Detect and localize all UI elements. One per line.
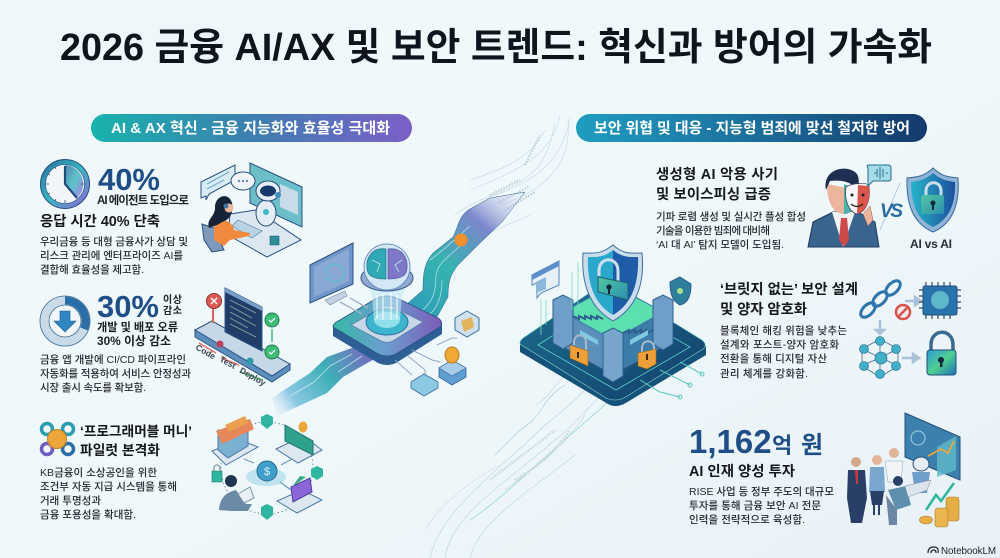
heading pill: security threats and response (576, 114, 927, 142)
stat: 30% fewer errors: 감소 (163, 305, 182, 317)
castle towers (553, 295, 573, 349)
castle walls (563, 312, 613, 375)
heading pill: AI & AX innovation (91, 114, 412, 142)
stat: 1,162 billion won AI talent (689, 423, 834, 526)
heading pill: security threats and response: 보안 위협 및 대응 - 지능형 범죄에 맞선 철저한 방어 (594, 120, 910, 137)
icon: coin with links (42, 424, 74, 454)
stat: generative AI fraud (656, 166, 806, 251)
data ribbon upper (408, 192, 525, 326)
stat: programmable money pilot: 파일럿 본격화 (80, 443, 160, 458)
data circuit lines: bottom stream (425, 370, 615, 558)
stat: generative AI fraud: 및 보이스피싱 급증 (656, 186, 771, 203)
stat: 1,162 billion won AI talent: 원 (801, 432, 823, 459)
icon: donut down arrow (40, 296, 90, 346)
stat: 40% faster response: 결합해 효율성을 제고함. (40, 263, 144, 276)
stat: bridgeless design and quantum crypto (720, 281, 858, 380)
illustration: CI/CD conveyor: Test (218, 354, 238, 371)
stat: 1,162 billion won AI talent: 억 (772, 433, 792, 458)
stat: bridgeless design and quantum crypto: 및 양자 암호화 (720, 301, 807, 318)
illustration: CI/CD conveyor (194, 288, 290, 388)
small shield (670, 277, 691, 305)
stat: 30% fewer errors: 30% 이상 감소 (97, 334, 171, 348)
coin stack (439, 360, 466, 385)
illustration: programmable money network: $ (264, 466, 270, 478)
chip tile (411, 374, 438, 396)
stat: 1,162 billion won AI talent: AI 인재 양성 투자 (689, 463, 795, 480)
data ribbon lower (272, 345, 376, 416)
stat: 30% fewer errors: 이상 (163, 293, 182, 306)
icon: clock (40, 160, 90, 208)
illustration: CI/CD conveyor: Code (194, 342, 218, 361)
central platform (333, 323, 442, 365)
stat: 1,162 billion won AI talent: 투자를 통해 금융 보안 AI 전문 (689, 499, 821, 512)
stat: 40% faster response: 우리금융 등 대형 금융사가 상담 및 (40, 235, 188, 248)
stat: 30% fewer errors: 금융 앱 개발에 CI/CD 파이프라인 (40, 353, 186, 366)
stat: bridgeless design and quantum crypto: 블록체인 해킹 위험을 낮추는 (720, 324, 847, 337)
cube hexagon (455, 311, 479, 337)
stat: 40% faster response: AI 에이전트 도입으로 (97, 194, 189, 207)
logo: NotebookLM: NotebookLM (941, 546, 996, 557)
illustration: CI/CD conveyor: Deploy (238, 365, 268, 388)
monitor (310, 243, 353, 303)
orange data dot (454, 234, 468, 246)
stat: programmable money pilot: 금융 포용성을 확대함. (40, 508, 136, 521)
stat: 30% fewer errors (40, 289, 191, 394)
illustration: deepfake man with mask (808, 165, 903, 247)
stat: 30% fewer errors: 개발 및 배포 오류 (97, 320, 178, 334)
circuit links (395, 338, 457, 376)
center illustration: security fortress (520, 245, 706, 406)
stat: generative AI fraud: 기술을 이용한 빔죄에 대비해 (656, 224, 770, 237)
stat: 1,162 billion won AI talent: 1,162 (689, 423, 772, 460)
stat: programmable money pilot: 거래 투명성과 (40, 495, 101, 507)
illustration: agent and robot desk (201, 163, 302, 257)
fortress platform (520, 343, 706, 406)
icon: AI vs AI shield (907, 168, 958, 251)
heading pill: AI & AX innovation: AI & AX 혁신 - 금융 지능화와 효율성 극대화 (111, 120, 390, 137)
data circuit lines: top right stream (455, 115, 570, 280)
illustration: talent team with robot and coins (847, 413, 960, 527)
stat: 30% fewer errors: 시장 출시 속도를 확보함. (40, 381, 146, 394)
stat: bridgeless design and quantum crypto: ‘브릿지 없는’ 보안 설계 (720, 281, 858, 298)
big shield with lock (583, 245, 643, 321)
stat: bridgeless design and quantum crypto: 설계와 포스트-양자 암호화 (720, 338, 839, 351)
stat: 40% faster response: 40% (98, 162, 160, 197)
orange padlocks (574, 335, 586, 350)
stat: 40% faster response: 리스크 관리에 엔터프라이즈 AI를 (40, 250, 183, 262)
stat: generative AI fraud: 기파 로렴 생성 및 실시간 플성 합성 (656, 210, 806, 223)
stat: programmable money pilot: KB금융이 소상공인을 위한 (40, 466, 157, 479)
stat: generative AI fraud: 생성형 AI 악용 사기 (656, 166, 778, 183)
VS label: VS (880, 201, 903, 222)
stat: programmable money pilot: 조건부 자동 지급 시스템을 통해 (40, 480, 177, 493)
stat: bridgeless design and quantum crypto: 관리 체계를 강화함. (720, 367, 808, 380)
icon: chain to chip to lock flow (858, 278, 961, 378)
stat: generative AI fraud: ‘AI 대 AI’ 탐지 모델이 도입됨. (656, 238, 784, 251)
stat: bridgeless design and quantum crypto: 전환을 통해 디지털 자산 (720, 352, 827, 365)
stat: 40% faster response: 응답 시간 40% 단축 (40, 213, 160, 230)
stat: 40% faster response (40, 160, 189, 276)
stat: 30% fewer errors: 자동화를 적용하여 서비스 안정성과 (40, 367, 191, 380)
brain dome (366, 282, 408, 320)
center illustration: AI brain platform (272, 192, 525, 416)
stat: 30% fewer errors: 30% (97, 289, 159, 324)
title: 2026 금융 AI/AX 및 보안 트렌드: 혁신과 방어의 가속화 (60, 27, 932, 69)
stat: 1,162 billion won AI talent: RISE 사업 등 정부 주도의 대규모 (689, 485, 834, 498)
icon: AI vs AI shield: AI vs AI (910, 237, 952, 251)
stat: programmable money pilot: ‘프로그래머블 머니’ (80, 424, 192, 439)
stat: programmable money pilot (40, 424, 192, 521)
floating window (532, 261, 559, 298)
stat: 1,162 billion won AI talent: 인력을 전략적으로 육성함. (689, 513, 805, 526)
illustration: programmable money network (212, 414, 323, 520)
